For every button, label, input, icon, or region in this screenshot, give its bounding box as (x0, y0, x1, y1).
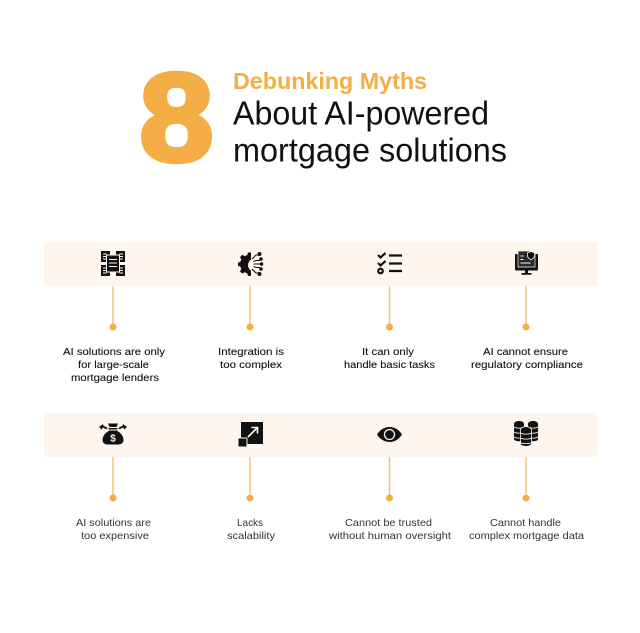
dot (386, 324, 393, 330)
band: row 2 (44, 413, 597, 457)
label: AI solutions are only (63, 346, 166, 358)
title line 1: About AI-powered (233, 94, 489, 132)
label: Lacks (237, 517, 263, 529)
heading: Debunking Myths: Debunking Myths (233, 68, 427, 94)
label: Cannot handle (490, 517, 561, 529)
dot (246, 324, 254, 330)
label: scalability (227, 530, 276, 542)
connector (388, 286, 390, 327)
numeral 8: 8 (140, 48, 214, 188)
connector (249, 457, 251, 498)
icon: scale arrow (238, 422, 263, 447)
dot (246, 494, 254, 502)
label (469, 517, 584, 542)
connector (525, 286, 527, 327)
label (328, 517, 451, 542)
dot (110, 324, 116, 330)
connector (525, 457, 527, 498)
label: mortgage lenders (71, 372, 159, 384)
band: row 1 (44, 242, 597, 286)
icon: documents (101, 251, 125, 276)
connector (249, 286, 251, 327)
dot (386, 494, 393, 502)
connector (112, 457, 114, 498)
label (218, 346, 284, 371)
label: complex mortgage data (469, 530, 584, 542)
dot (110, 494, 116, 502)
label (227, 517, 276, 542)
myth 3 (344, 253, 435, 371)
label: It can only (362, 346, 415, 358)
dot (522, 494, 530, 502)
icon: databases (514, 421, 538, 446)
label (471, 346, 583, 371)
connector (388, 457, 390, 498)
label (344, 346, 435, 371)
label: too expensive (81, 530, 149, 542)
connector (112, 286, 114, 327)
icon: gear with nodes (238, 252, 263, 276)
label: without human oversight (328, 530, 451, 542)
label: handle basic tasks (344, 359, 435, 371)
label: Cannot be trusted (345, 517, 432, 529)
myth 1 (63, 251, 166, 384)
dot (522, 324, 530, 330)
myth 5 (76, 424, 151, 542)
label: regulatory compliance (471, 359, 583, 371)
myth 7 (328, 427, 451, 542)
label: AI solutions are (76, 517, 151, 529)
icon: money bag: $ (110, 434, 116, 444)
icon: checklist (378, 253, 402, 273)
icon: eye (377, 427, 402, 442)
label: AI cannot ensure (483, 346, 568, 358)
myth 4 (471, 251, 583, 371)
myth 8 (469, 421, 584, 542)
label (63, 346, 166, 384)
label: for large-scale (78, 359, 149, 371)
label: too complex (220, 359, 283, 371)
myth 6 (227, 422, 276, 542)
label: Integration is (218, 346, 284, 358)
header (140, 48, 507, 188)
label (76, 517, 151, 542)
icon: monitor compliance (515, 251, 538, 275)
myth 2 (218, 252, 284, 371)
title line 2: mortgage solutions (233, 132, 507, 168)
